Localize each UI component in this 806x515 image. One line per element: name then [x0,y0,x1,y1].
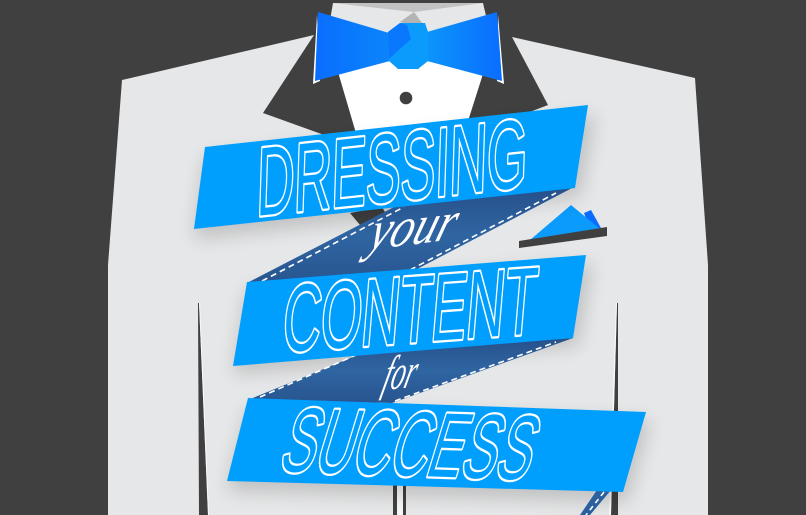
script word: your: your [358,190,468,263]
centre placket lines [393,480,406,515]
ribbon: dressing: DRESSING [255,98,529,237]
ribbon: success [227,388,646,499]
fold band 2 [248,338,573,403]
fold band 3 [580,490,611,515]
ribbon: success: SUCCESS [271,388,552,499]
shirt front [333,55,489,140]
ribbon: content [233,247,586,373]
jacket seam right [609,303,618,515]
jacket seam left [198,303,209,515]
collar [330,3,487,34]
ribbon: content: CONTENT [279,247,542,373]
jacket [108,35,708,515]
ribbon: dressing [194,98,588,237]
ribbon shadows [194,115,650,502]
fold band 1 [247,188,572,283]
script word: for: for [378,343,425,401]
shirt button [400,92,412,104]
lapel remnant below ribbon [350,207,385,225]
pocket square [519,205,607,248]
bow tie [313,12,504,84]
